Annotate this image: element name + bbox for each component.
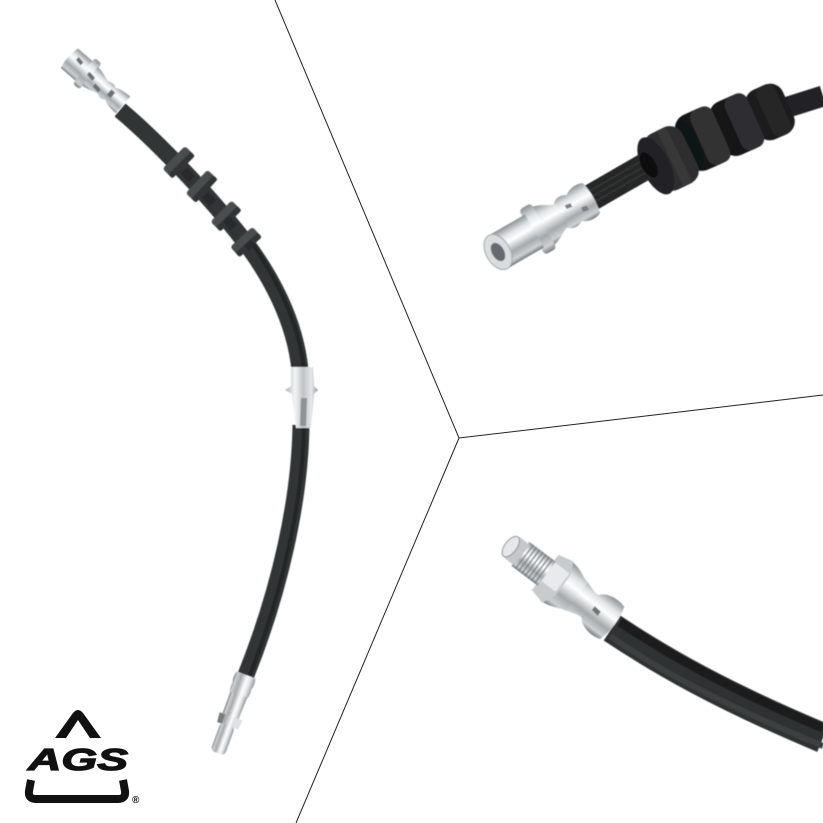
male fitting [490, 522, 630, 646]
top fitting [57, 44, 134, 118]
ribbed hose [475, 139, 668, 281]
logo chevron [55, 710, 101, 738]
tapered body [530, 196, 573, 246]
bottom fitting [206, 671, 257, 757]
AGS logo [27, 710, 140, 806]
thread [511, 542, 556, 586]
mounting grommet 4 [230, 227, 262, 257]
mounting grommet 3 [210, 200, 242, 232]
hose shading [250, 240, 304, 675]
flange [519, 203, 557, 255]
hose upper section [120, 110, 300, 370]
detail: male fitting and hose [490, 522, 823, 746]
hose lower section [246, 425, 301, 675]
rear hose [785, 96, 823, 108]
tip [502, 536, 530, 565]
middle ferrule [285, 367, 318, 428]
full brake hose [57, 44, 318, 757]
logo wordmark: AGS [27, 742, 128, 777]
mounting grommet 2 [186, 170, 218, 203]
threaded bore [488, 240, 508, 264]
tip bore [499, 533, 523, 560]
grommet 1 [630, 121, 704, 200]
registered mark: ® [132, 795, 140, 806]
divider lines [275, 0, 823, 823]
hose grommet hole [636, 149, 662, 181]
hose body [612, 628, 823, 738]
grommet 2 [668, 103, 733, 177]
end face [478, 230, 518, 274]
grommet 4 [741, 79, 799, 145]
body [541, 561, 592, 617]
grommet 3 [702, 90, 767, 162]
detail: female fitting and grommets [475, 79, 823, 281]
logo bracket [29, 780, 125, 799]
hex nut [529, 552, 578, 606]
mounting grommet 1 [162, 146, 195, 179]
crimp [561, 577, 628, 642]
hose over grommets [172, 157, 252, 248]
nose [488, 215, 544, 268]
crimp [551, 181, 603, 232]
